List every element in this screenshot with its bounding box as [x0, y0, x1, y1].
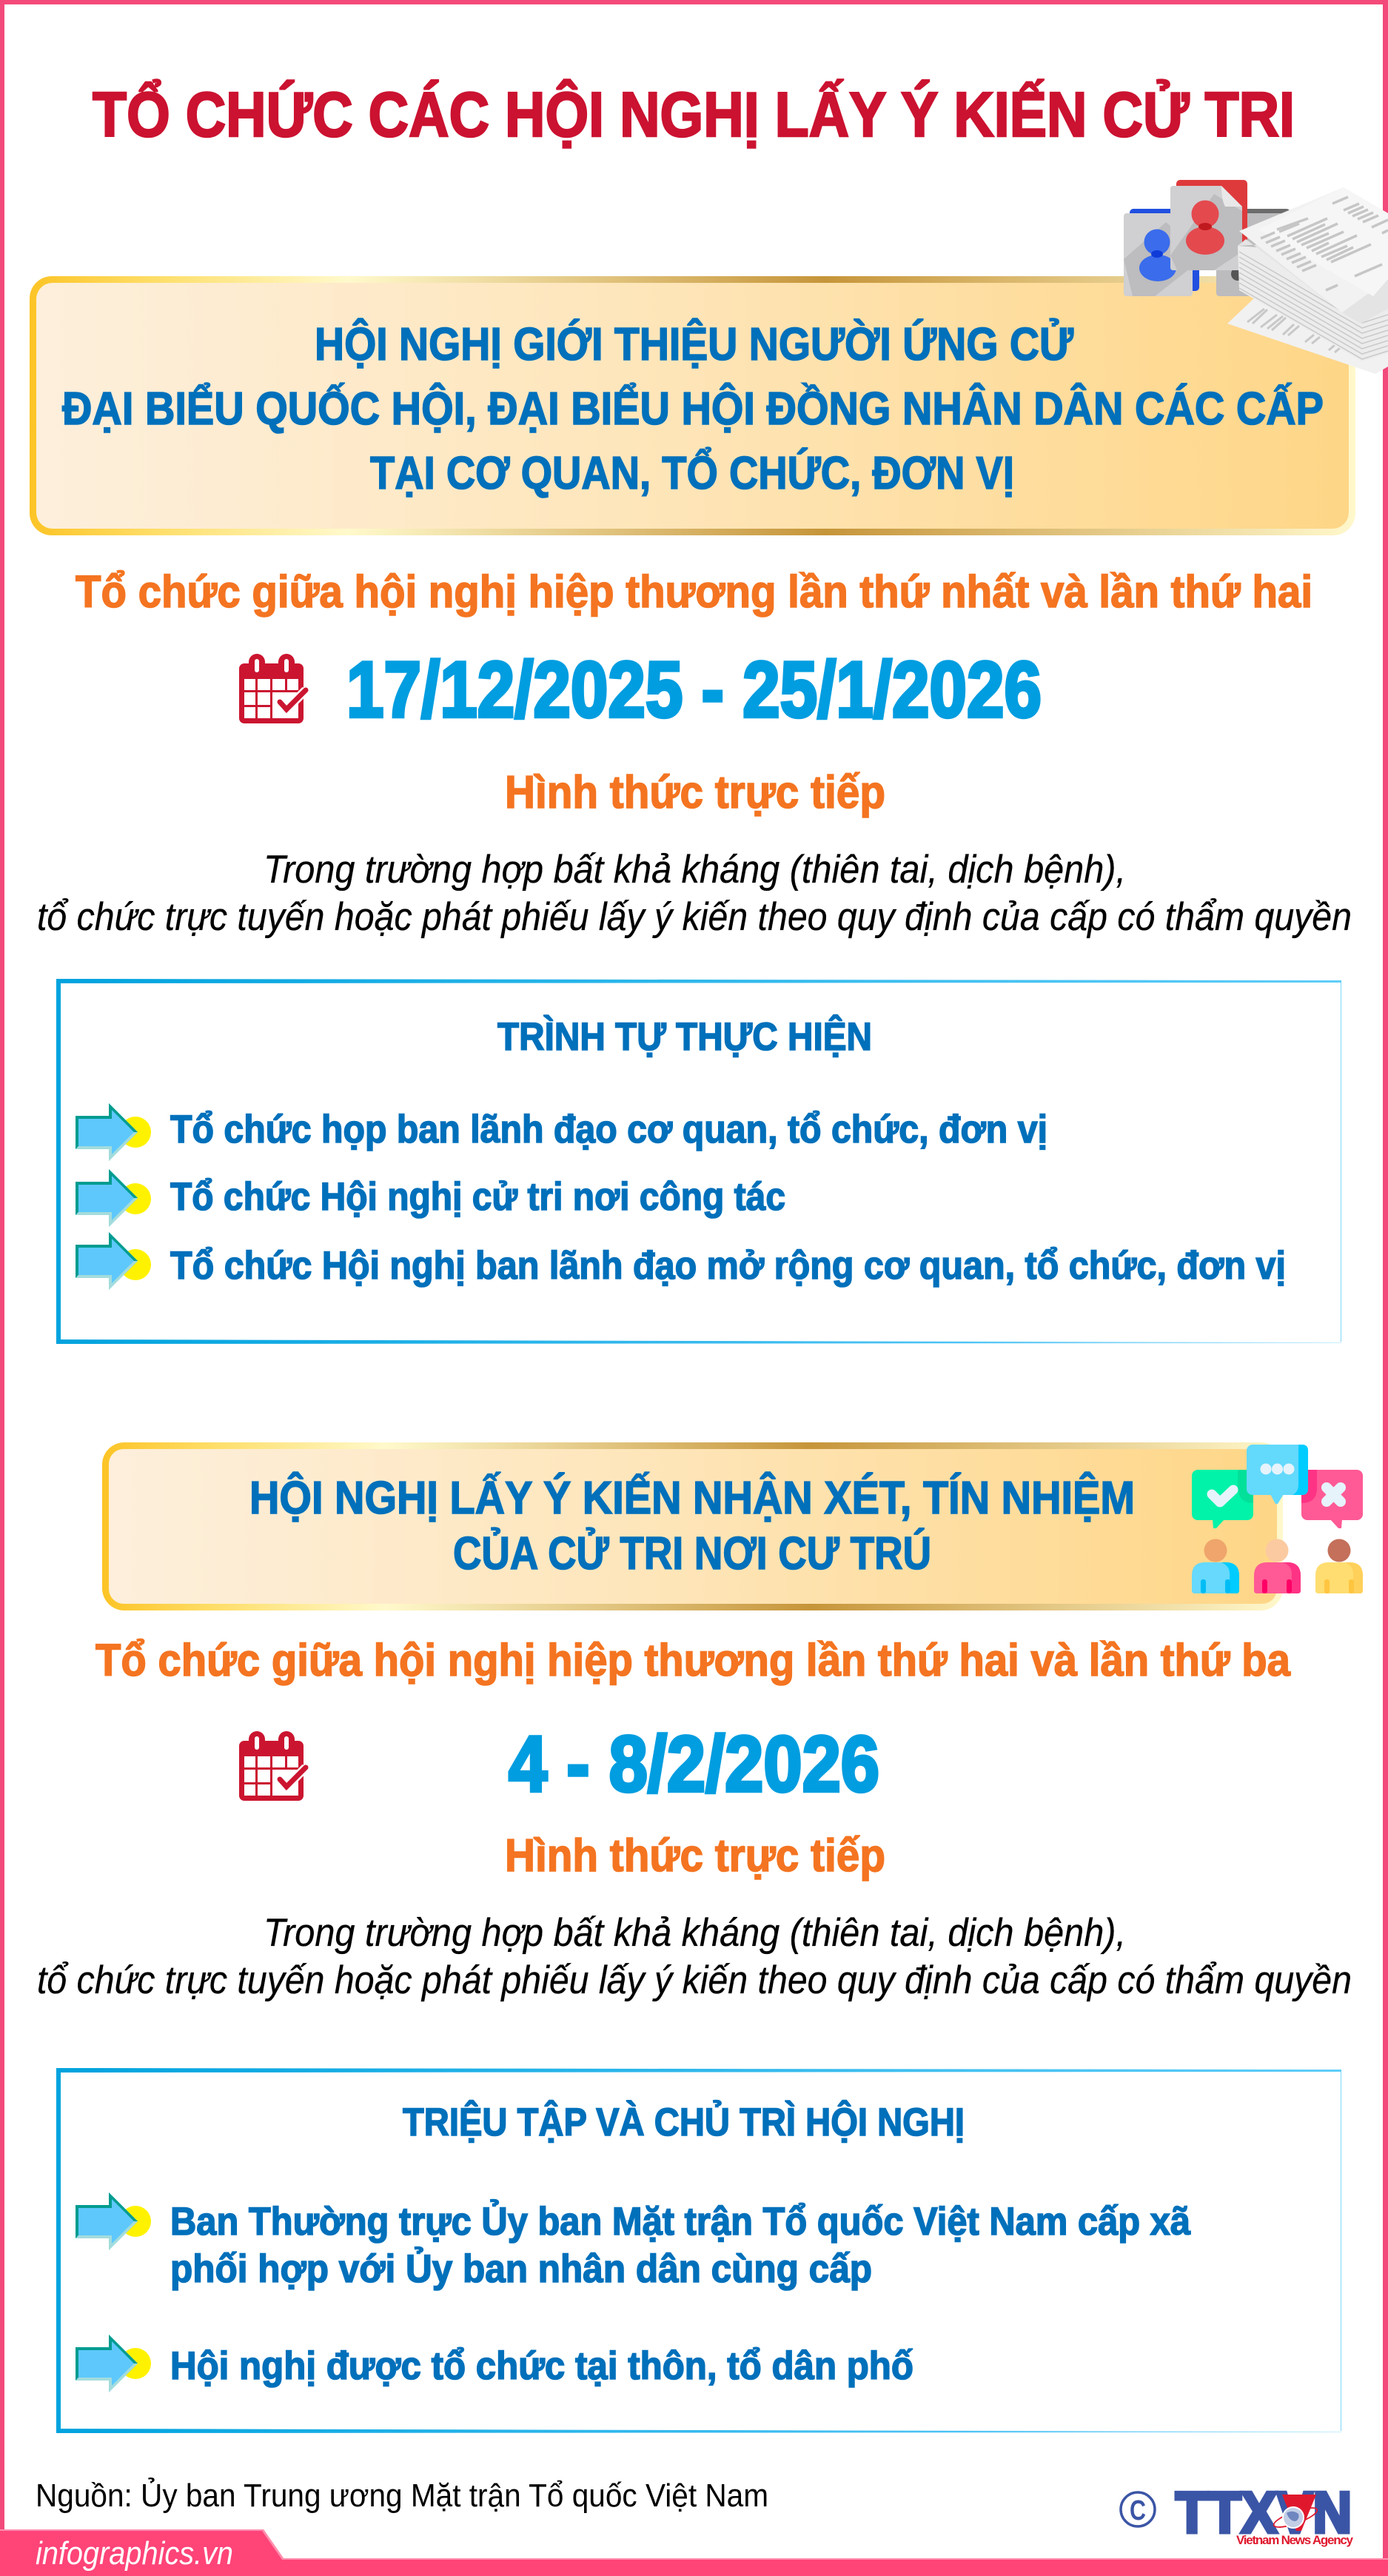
website label: infographics.vn — [36, 2535, 233, 2572]
section 1 timing subtitle: Tổ chức giữa hội nghị hiệp thương lần thứ nhất và lần thứ hai — [76, 566, 1312, 617]
arrow bullet 1 — [76, 1103, 151, 1161]
date range 2: 4 - 8/2/2026 — [509, 1719, 879, 1808]
panel: section 1 banner — [30, 276, 1355, 535]
item a text: phối hợp với Ủy ban nhân dân cùng cấp — [170, 2247, 872, 2291]
section 2 timing subtitle: Tổ chức giữa hội nghị hiệp thương lần thứ hai và lần thứ ba — [95, 1635, 1291, 1685]
panel: section 2 banner — [102, 1442, 1283, 1610]
source: Nguồn: Ủy ban Trung ương Mặt trận Tổ quốc Việt Nam — [36, 2476, 768, 2514]
logo: TTXVN: C — [1130, 2495, 1146, 2526]
icon: candidate files and paper stack — [1124, 180, 1388, 374]
arrow bullet 2 — [76, 1169, 151, 1227]
banner 1 heading — [62, 319, 1324, 499]
logo: TTXVN: TTXVN — [1176, 2480, 1352, 2545]
item a text: Ban Thường trực Ủy ban Mặt trận Tổ quốc Việt Nam cấp xã — [170, 2199, 1190, 2244]
icon: calendar 2 — [239, 1731, 306, 1801]
format label 2: Hình thức trực tiếp — [505, 1830, 885, 1881]
date range 1: 17/12/2025 - 25/1/2026 — [346, 645, 1042, 734]
footer ribbon — [0, 2529, 1388, 2576]
banner 1 heading: TẠI CƠ QUAN, TỔ CHỨC, ĐƠN VỊ — [370, 447, 1014, 499]
step 1 text: Tổ chức họp ban lãnh đạo cơ quan, tổ chức, đơn vị — [170, 1108, 1047, 1151]
note 1 — [37, 848, 1352, 939]
item b text: Hội nghị được tổ chức tại thôn, tổ dân phố — [170, 2344, 913, 2388]
note 2: Trong trường hợp bất khả kháng (thiên tai, dịch bệnh), — [264, 1911, 1126, 1955]
arrow bullet a — [76, 2192, 151, 2250]
logo: TTXVN: Vietnam News Agency — [1236, 2533, 1354, 2547]
note 1: Trong trường hợp bất khả kháng (thiên tai, dịch bệnh), — [264, 848, 1126, 891]
step 3 text: Tổ chức Hội nghị ban lãnh đạo mở rộng cơ quan, tổ chức, đơn vị — [170, 1244, 1286, 1288]
arrow bullet b — [76, 2335, 151, 2392]
step 2 text: Tổ chức Hội nghị cử tri nơi công tác — [170, 1175, 785, 1219]
item a text — [170, 2199, 1190, 2291]
note 2 — [37, 1911, 1352, 2002]
arrow bullet 3 — [76, 1232, 151, 1290]
format label 1: Hình thức trực tiếp — [505, 767, 885, 818]
banner 2 heading: HỘI NGHỊ LẤY Ý KIẾN NHẬN XÉT, TÍN NHIỆM — [249, 1473, 1135, 1524]
panel: sequence of steps — [56, 979, 1341, 1344]
icon: calendar 1 — [239, 654, 306, 723]
panel heading: TRÌNH TỰ THỰC HIỆN — [497, 1014, 872, 1059]
banner 2 heading — [249, 1473, 1135, 1579]
panel: convening and chairing — [56, 2068, 1341, 2433]
banner 1 heading: HỘI NGHỊ GIỚI THIỆU NGƯỜI ỨNG CỬ — [315, 319, 1073, 370]
icon: voters with speech bubbles — [1192, 1445, 1363, 1593]
banner 2 heading: CỦA CỬ TRI NƠI CƯ TRÚ — [453, 1528, 931, 1579]
panel heading 2: TRIỆU TẬP VÀ CHỦ TRÌ HỘI NGHỊ — [403, 2099, 965, 2144]
